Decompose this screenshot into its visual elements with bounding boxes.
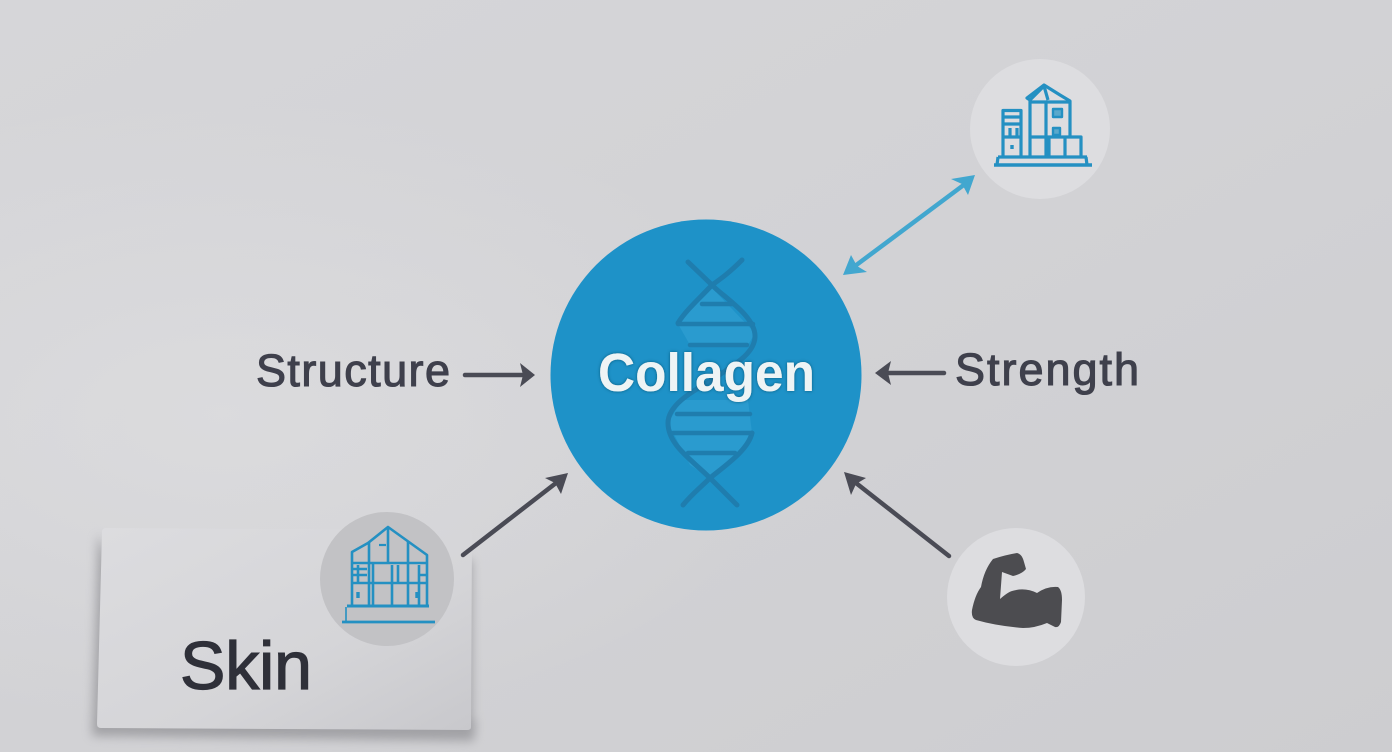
- icon: DNA helix: [668, 260, 755, 505]
- arrow: skin badge to Collagen: [463, 473, 568, 555]
- label: Skin: Skin: [180, 628, 312, 704]
- central circle: Collagen: [550, 220, 862, 530]
- arrow: double-headed Collagen to top building: [843, 175, 975, 275]
- arrow: Strength to Collagen: [875, 361, 944, 385]
- label: Collagen: Collagen: [598, 343, 815, 403]
- icon: building badge on skin card: [320, 512, 454, 646]
- arrow: Structure to Collagen: [465, 363, 535, 387]
- icon: building badge top right: [970, 59, 1110, 199]
- label: Structure: Structure: [256, 345, 450, 396]
- label: Strength: Strength: [955, 344, 1139, 395]
- panel: skin card: [92, 528, 476, 741]
- icon: flexed arm badge: [947, 528, 1085, 666]
- arrow: arm badge to Collagen: [844, 472, 949, 556]
